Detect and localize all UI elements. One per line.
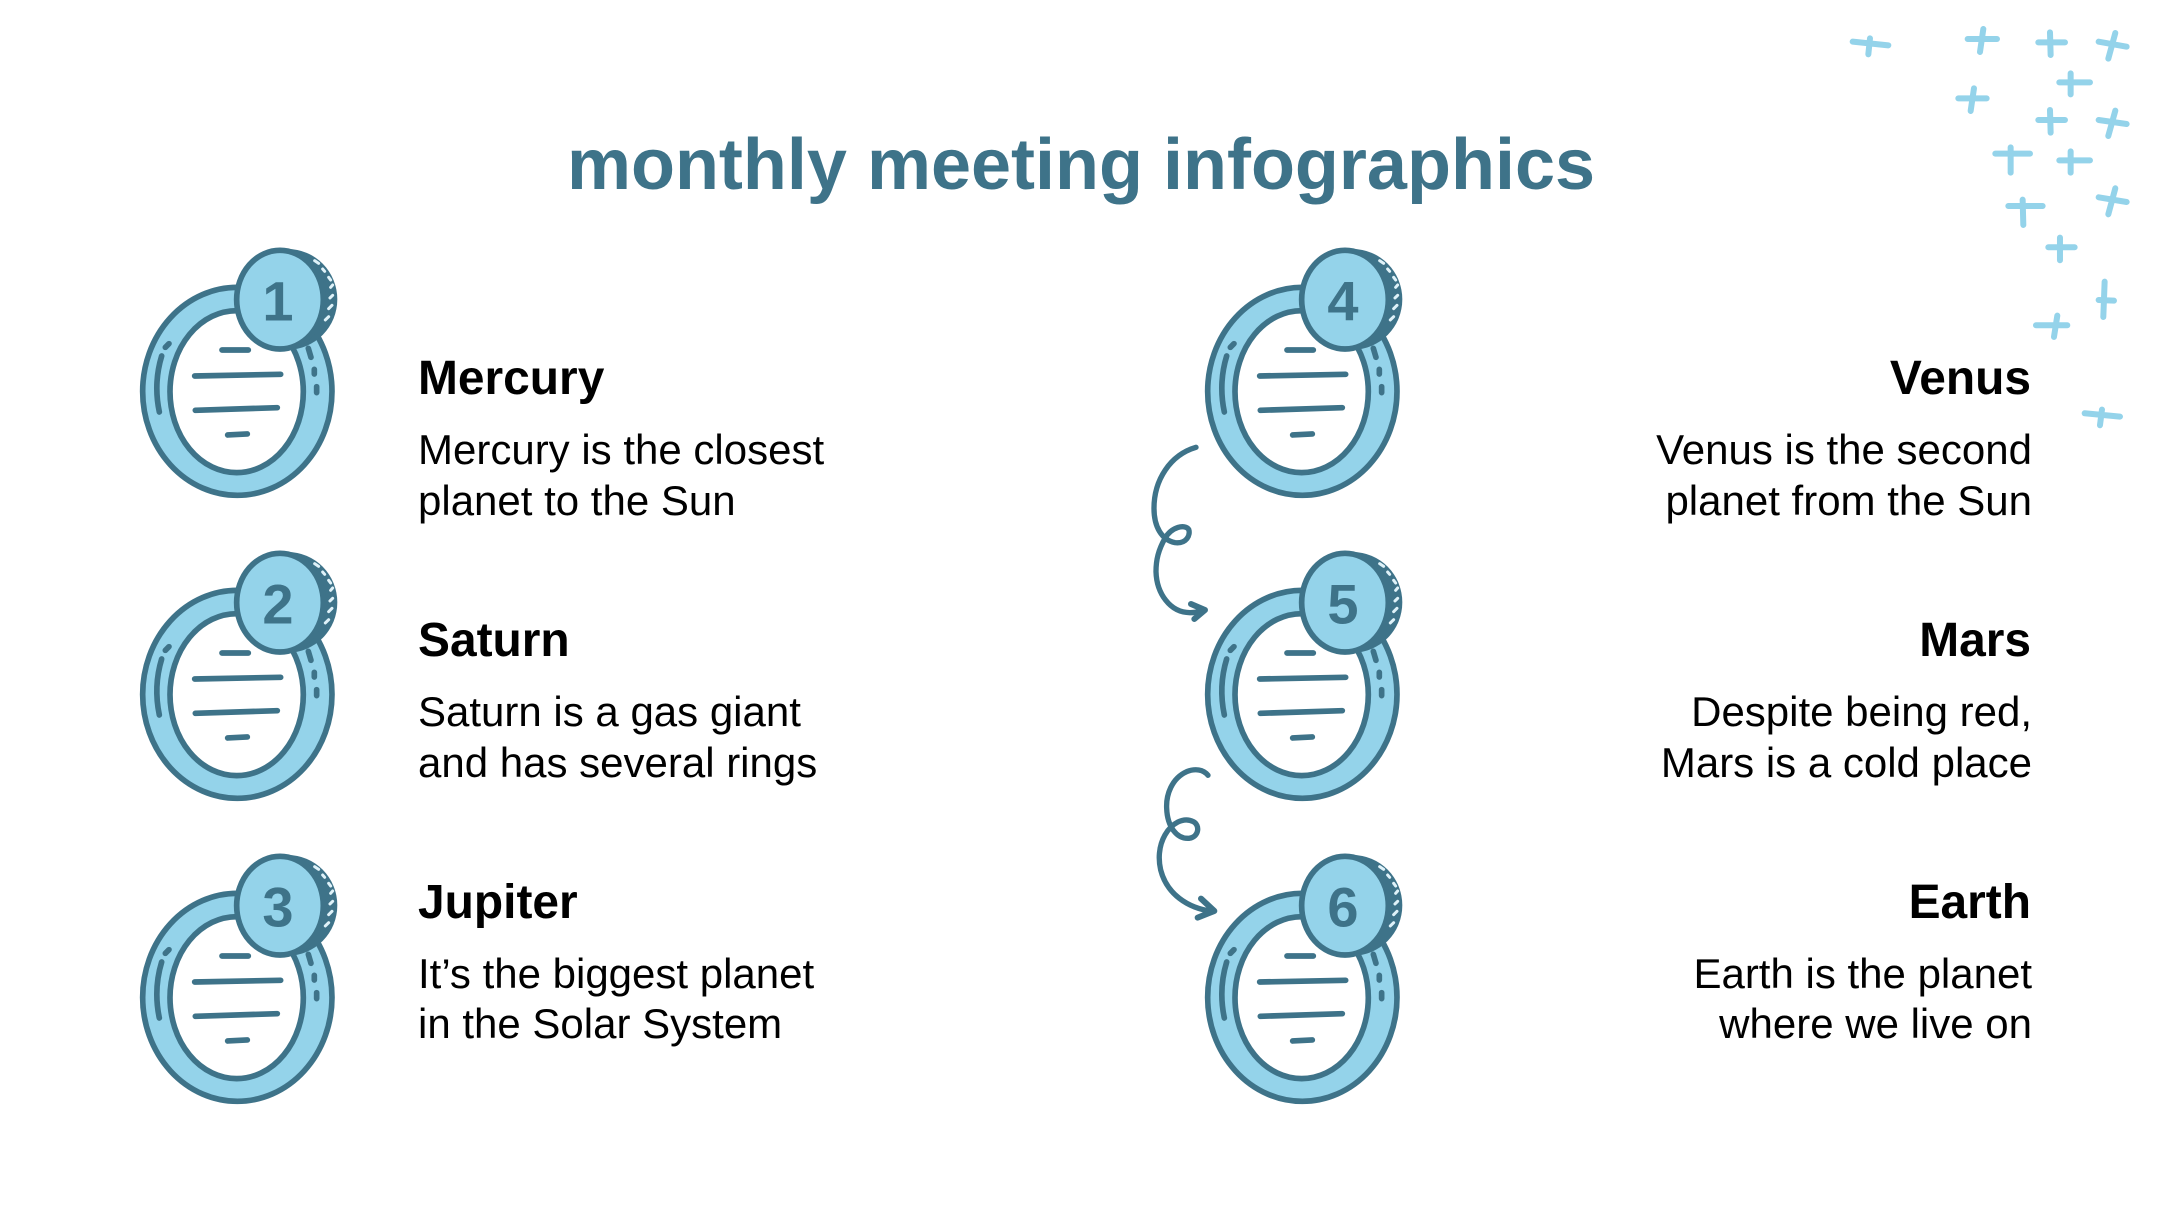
title: monthly meeting infographics bbox=[567, 125, 1595, 205]
text block: Earth: Earth bbox=[1909, 876, 2031, 929]
text block: Venus bbox=[1656, 352, 2032, 524]
arrow: badge 5 to 6 bbox=[1159, 770, 1214, 918]
text block: Jupiter: Jupiter bbox=[418, 876, 578, 929]
text block: Saturn bbox=[418, 614, 817, 786]
icon: badge 6: 6 bbox=[1327, 875, 1359, 938]
icon: badge 6 bbox=[1208, 855, 1402, 1101]
text block: Earth: where we live on bbox=[1718, 1000, 2032, 1047]
text block: Earth bbox=[1693, 876, 2032, 1047]
text block: Saturn: Saturn is a gas giant bbox=[418, 688, 801, 735]
text block: Mercury bbox=[418, 352, 824, 524]
icon: badge 5 bbox=[1208, 552, 1402, 798]
text block: Venus: Venus is the second bbox=[1656, 426, 2032, 473]
text block: Earth: Earth is the planet bbox=[1693, 950, 2032, 997]
text block: Jupiter: It’s the biggest planet bbox=[418, 950, 815, 997]
text block: Mercury: planet to the Sun bbox=[418, 477, 736, 524]
text block: Mars bbox=[1661, 614, 2032, 786]
icon: badge 2 bbox=[143, 552, 337, 798]
arrow: badge 4 to 5 bbox=[1154, 447, 1205, 619]
icon: badge 3: 3 bbox=[262, 875, 294, 938]
text block: Mars: Despite being red, bbox=[1691, 688, 2032, 735]
text block: Mars: Mars bbox=[1919, 614, 2031, 667]
icon: badge 3 bbox=[143, 855, 337, 1101]
text block: Saturn: Saturn bbox=[418, 614, 570, 667]
text block: Jupiter bbox=[418, 876, 815, 1047]
text block: Venus: Venus bbox=[1890, 352, 2031, 405]
icon: badge 1: 1 bbox=[262, 269, 294, 332]
icon: badge 4: 4 bbox=[1327, 269, 1359, 332]
icon: badge 5: 5 bbox=[1327, 572, 1359, 635]
icon: badge 2: 2 bbox=[262, 572, 294, 635]
decoration: scattered crosses bbox=[1853, 29, 2127, 425]
text block: Mercury: Mercury bbox=[418, 352, 605, 405]
text block: Saturn: and has several rings bbox=[418, 739, 817, 786]
icon: badge 4 bbox=[1208, 249, 1402, 495]
text block: Mars: Mars is a cold place bbox=[1661, 739, 2032, 786]
text block: Jupiter: in the Solar System bbox=[418, 1000, 782, 1047]
text block: Mercury: Mercury is the closest bbox=[418, 426, 824, 473]
text block: Venus: planet from the Sun bbox=[1665, 477, 2032, 524]
icon: badge 1 bbox=[143, 249, 337, 495]
